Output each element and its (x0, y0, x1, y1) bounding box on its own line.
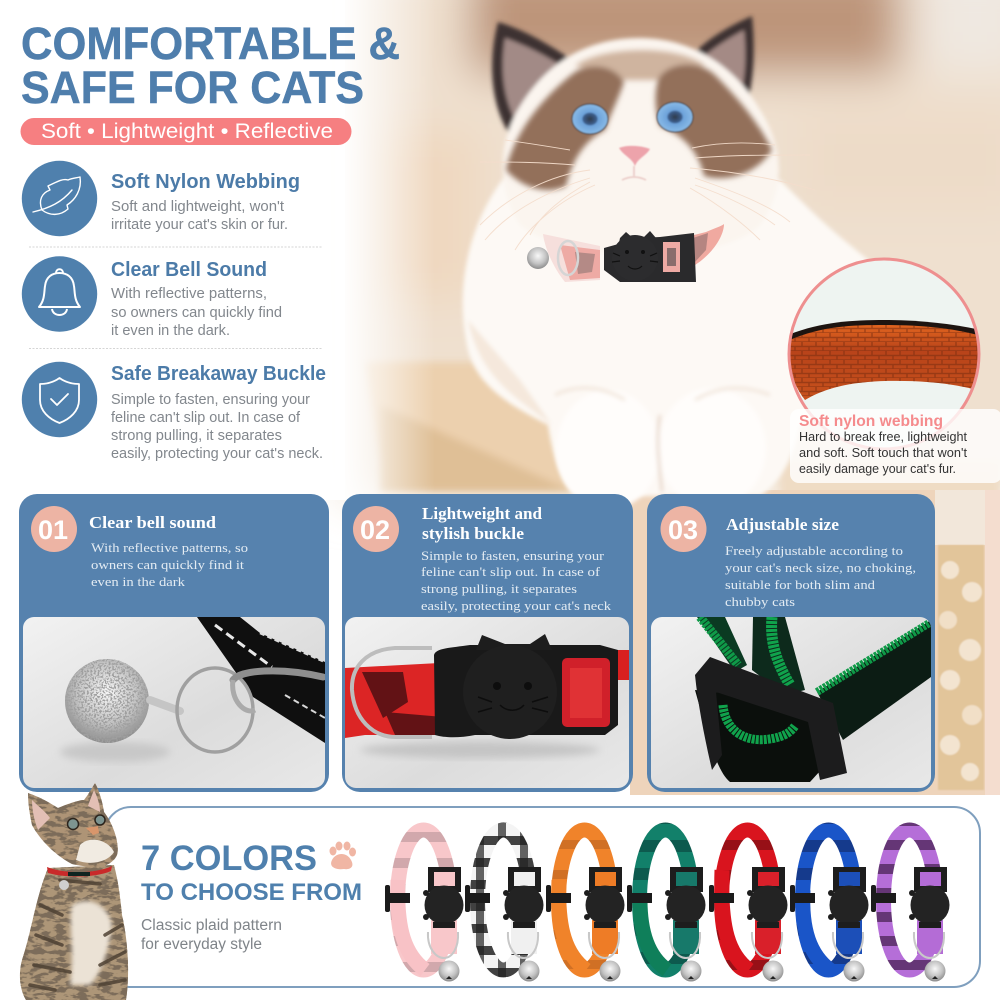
photo: green collar adjuster (651, 617, 931, 788)
heading: 7 colors: 7 COLORS (141, 839, 317, 878)
panel 02: lightweight and stylish buckle (342, 494, 633, 792)
feature: soft nylon webbing: Soft Nylon Webbing (111, 171, 300, 193)
badge 01: 01 (38, 515, 68, 545)
panel 01: clear bell sound: owners can quickly find it (91, 557, 244, 572)
feature: clear bell sound: so owners can quickly find (111, 305, 282, 321)
head (503, 38, 779, 255)
collar: purple (871, 830, 950, 982)
panel 01: clear bell sound (19, 494, 329, 792)
photo: silver bell on ring (23, 617, 325, 788)
feature: soft nylon webbing: Soft and lightweight, won't (111, 199, 284, 215)
icon: shield with check (22, 362, 97, 437)
collar: black plaid (465, 830, 544, 982)
feature: safe breakaway buckle: feline can't slip out. In case of (111, 410, 301, 426)
photo: tabby kitten with collar (20, 783, 128, 1000)
heading: to choose from: TO CHOOSE FROM (141, 879, 362, 906)
panel 01: clear bell sound: Clear bell sound (89, 513, 217, 532)
collar: red (709, 830, 788, 982)
collars row (385, 830, 950, 982)
kitten head (28, 783, 118, 867)
right brown mask (656, 65, 772, 178)
collar: blue (790, 830, 868, 982)
badge 01 (31, 506, 77, 552)
icon: feather (22, 161, 97, 236)
title (21, 18, 400, 113)
panel 02: lightweight and stylish buckle: easily, protecting your cat's neck (421, 598, 612, 613)
feature: safe breakaway buckle: strong pulling, it separates (111, 428, 282, 444)
eyes (572, 102, 693, 134)
whiskers (480, 140, 815, 250)
badge 03: 03 (668, 515, 698, 545)
icon: bell (22, 256, 97, 332)
left brown mask (506, 67, 624, 190)
photo: red plaid collar buckle (345, 617, 629, 788)
panel 03: adjustable size: Freely adjustable according to (725, 543, 903, 558)
feature: safe breakaway buckle (22, 362, 326, 462)
feature: clear bell sound: Clear Bell Sound (111, 259, 267, 281)
text: classic plaid pattern: Classic plaid pattern (141, 917, 282, 934)
cat body (463, 170, 906, 496)
badge 02 (353, 506, 399, 552)
panel 03: adjustable size: your cat's neck size, no choking, (725, 560, 916, 575)
text: classic plaid pattern (141, 917, 282, 953)
callout: soft nylon webbing close-up (785, 258, 1000, 483)
panel 02: lightweight and stylish buckle: feline can't slip out. In case of (421, 564, 601, 579)
callout text box (790, 409, 1000, 483)
callout text box: Soft nylon webbing (799, 413, 943, 430)
badge 02: 02 (360, 515, 390, 545)
feature: clear bell sound: it even in the dark. (111, 323, 230, 339)
panel 03: adjustable size: Adjustable size (726, 515, 839, 534)
title: COMFORTABLE & (21, 18, 400, 69)
kitten collar (47, 866, 112, 890)
callout text box: easily damage your cat's fur. (799, 462, 956, 476)
panel 02: lightweight and stylish buckle: strong pulling, it separates (421, 581, 577, 596)
icon: paw (330, 842, 356, 869)
paws (555, 388, 770, 510)
ears (492, 22, 575, 135)
panel 02: lightweight and stylish buckle: Simple to fasten, ensuring your (421, 548, 605, 563)
cat collar with buckle and bell (527, 224, 724, 282)
photo: ragdoll cat wearing collar (463, 16, 906, 510)
panel 02: lightweight and stylish buckle: Lightweight and (422, 504, 543, 523)
panel 03: adjustable size: chubby cats (725, 594, 795, 609)
panel 03: adjustable size: suitable for both slim and (725, 577, 876, 592)
callout text box: Hard to break free, lightweight (799, 430, 968, 444)
callout text box: and soft. Soft touch that won't (799, 446, 968, 460)
collar: pink (385, 830, 464, 982)
collar: orange (546, 830, 624, 982)
panel 01: clear bell sound: even in the dark (91, 574, 186, 589)
feature: safe breakaway buckle: Safe Breakaway Buckle (111, 363, 326, 385)
text: classic plaid pattern: for everyday style (141, 936, 262, 953)
feature: safe breakaway buckle: Simple to fasten, ensuring your (111, 392, 310, 408)
feature: clear bell sound (22, 256, 282, 339)
title: SAFE FOR CATS (21, 62, 364, 113)
tag pill: Soft, Lightweight, Reflective: Soft • Lightweight • Reflective (41, 120, 333, 143)
feature: soft nylon webbing: irritate your cat's skin or fur. (111, 217, 288, 233)
panel 03: adjustable size (647, 494, 935, 792)
magnified webbing circle (785, 258, 985, 450)
feature: soft nylon webbing (22, 161, 300, 236)
bottom panel: colour options (105, 807, 980, 987)
feature: safe breakaway buckle: easily, protecting your cat's neck. (111, 446, 323, 462)
feature: clear bell sound: With reflective patterns, (111, 286, 267, 302)
panel 01: clear bell sound: With reflective patterns, so (91, 540, 248, 555)
nose (619, 146, 650, 166)
badge 03 (660, 506, 706, 552)
panel 02: lightweight and stylish buckle: stylish buckle (422, 524, 524, 543)
collar: green (627, 830, 706, 982)
forehead tone (575, 50, 705, 80)
